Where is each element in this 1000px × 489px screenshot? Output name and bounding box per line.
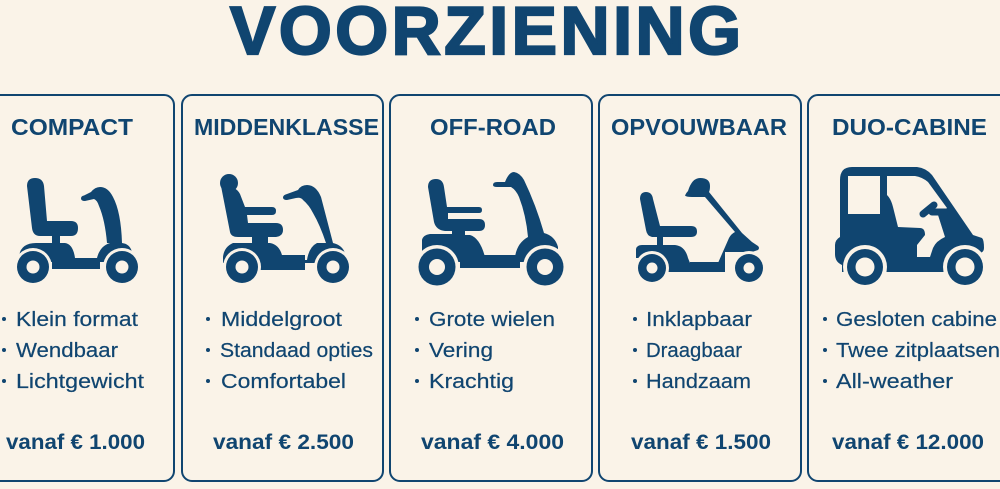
bullet list: opvouwbaar: Draagbaar bbox=[646, 340, 742, 362]
panel: middenklasse bbox=[182, 95, 383, 481]
bullet list: middenklasse: Middelgroot bbox=[221, 309, 342, 331]
icon: duo-cabine vehicle bbox=[835, 167, 987, 289]
bullet list: compact: Lichtgewicht bbox=[16, 371, 145, 393]
price: opvouwbaar: vanaf € 1.500 bbox=[631, 431, 771, 454]
icon: opvouwbaar scooter bbox=[635, 178, 766, 285]
bullet list: off-road: Vering bbox=[429, 340, 493, 362]
bullet list: off-road: Grote wielen bbox=[429, 309, 555, 331]
bullet list: middenklasse bbox=[206, 309, 373, 393]
heading: middenklasse: MIDDENKLASSE bbox=[194, 114, 379, 140]
panel: opvouwbaar bbox=[599, 95, 801, 481]
icon: off-road scooter bbox=[415, 172, 567, 289]
bullet list: duo-cabine bbox=[823, 309, 1000, 393]
bullet list: compact: Wendbaar bbox=[16, 340, 118, 362]
bullet list: opvouwbaar: Handzaam bbox=[646, 371, 751, 393]
price: duo-cabine: vanaf € 12.000 bbox=[832, 431, 984, 454]
bullet list: off-road bbox=[415, 309, 555, 393]
price: compact: vanaf € 1.000 bbox=[6, 431, 145, 454]
bullet list: middenklasse: Standaad opties bbox=[220, 340, 373, 362]
bullet list: compact: Klein format bbox=[16, 309, 138, 331]
icon: compact scooter bbox=[14, 178, 141, 286]
price: off-road: vanaf € 4.000 bbox=[421, 431, 564, 454]
panel: compact bbox=[0, 95, 174, 481]
panel: duo-cabine bbox=[808, 95, 1000, 481]
icon: middenklasse scooter bbox=[220, 174, 352, 286]
heading: off-road: OFF-ROAD bbox=[430, 114, 556, 140]
bullet list: compact bbox=[2, 309, 145, 393]
bullet list: duo-cabine: Twee zitplaatsen bbox=[836, 340, 1000, 362]
bullet list: middenklasse: Comfortabel bbox=[221, 371, 346, 393]
bullet list: opvouwbaar: Inklapbaar bbox=[646, 309, 752, 331]
heading: opvouwbaar: OPVOUWBAAR bbox=[611, 114, 787, 140]
panel: off-road bbox=[390, 95, 592, 481]
heading: duo-cabine: DUO-CABINE bbox=[832, 114, 987, 140]
bullet list: off-road: Krachtig bbox=[429, 371, 514, 393]
bullet list: duo-cabine: All-weather bbox=[836, 371, 953, 393]
price: middenklasse: vanaf € 2.500 bbox=[213, 431, 354, 454]
bullet list: duo-cabine: Gesloten cabine bbox=[836, 309, 997, 331]
heading: compact: COMPACT bbox=[11, 114, 133, 140]
bullet list: opvouwbaar bbox=[633, 309, 752, 393]
